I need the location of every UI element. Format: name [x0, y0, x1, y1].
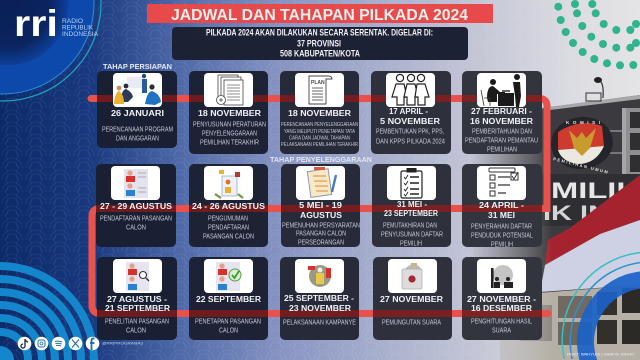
- card: 24 april: [462, 164, 542, 248]
- card: 24 april: PENYERAHAN DAFTAR: [471, 224, 532, 230]
- concrete grid: [500, 285, 640, 360]
- card: 18 november penyusunan: 18 NOVEMBER: [198, 108, 262, 118]
- banner lettering: MILIH: [551, 178, 640, 203]
- card: 31 mei: [372, 164, 451, 248]
- card: 26 januari: DAN ANGGARAN: [116, 136, 159, 142]
- social media icons: [18, 337, 143, 350]
- icon: documents: [216, 75, 243, 105]
- card: 17 april: 5 NOVEMBER: [380, 116, 441, 126]
- card: 5 mei: [281, 164, 360, 247]
- red flag band: [545, 175, 640, 265]
- card: 24 april: 31 MEI: [488, 210, 515, 220]
- heading: tahap penyelenggaraan: TAHAP PENYELENGGARAAN: [270, 155, 372, 164]
- card: 24-26 agustus: [189, 164, 268, 247]
- card: 27-29 agustus: 27 - 29 AGUSTUS: [100, 201, 172, 211]
- card: 24 april: PEMILIH: [491, 242, 513, 248]
- rri logo: INDONESIA: [62, 31, 99, 38]
- banner lettering: [544, 182, 624, 220]
- icon: form list: [489, 168, 518, 196]
- rri logo: REPUBLIK: [62, 24, 94, 32]
- card: 24-26 agustus: PENDAFTARAN: [208, 224, 249, 232]
- card: 27 agustus: 27 AGUSTUS -: [107, 294, 167, 304]
- rri logo: RADIO: [62, 18, 83, 25]
- card: 27 november - 16 desember: 27 NOVEMBER -: [467, 294, 536, 304]
- card: 18 november perencanaan: 18 NOVEMBER: [288, 108, 352, 118]
- card: 17 april: 17 APRIL -: [389, 106, 428, 116]
- subtitle panel: 37 PROVINSI: [297, 38, 341, 50]
- card: 24-26 agustus: PENGUMUMAN: [208, 216, 248, 222]
- card: 27 agustus: 21 SEPTEMBER: [105, 303, 171, 313]
- card: 24-26 agustus: PASANGAN CALON: [203, 234, 254, 240]
- card: 27 november - 16 desember: PENGHITUNGAN HASIL: [471, 318, 532, 326]
- heading: tahap persiapan: TAHAP PERSIAPAN: [103, 62, 172, 71]
- card: 31 mei: PEMUTAKHIRAN DAN: [383, 222, 437, 230]
- card: 26 januari: [97, 71, 177, 148]
- card: 26 januari: 26 JANUARI: [111, 108, 164, 118]
- card: 17 april: [371, 71, 451, 154]
- card: 27 agustus: [97, 257, 177, 340]
- card: 24 april: PENDUDUK POTENSIAL: [471, 232, 533, 240]
- card: 5 mei: PERSEORANGAN: [298, 240, 344, 246]
- card: 5 mei: 5 MEI - 19: [299, 200, 342, 210]
- card: 18 november penyusunan: PEMILIHAN TERAKHIR: [200, 140, 259, 146]
- subtitle panel: 508 KABUPATEN/KOTA: [280, 48, 360, 60]
- social media icons: @RRIPROGRAMA3: [102, 342, 143, 346]
- card: 18 november perencanaan: PERENCANAAN PENYELENGGARAAN: [281, 122, 358, 128]
- card: 27 november: [373, 257, 452, 340]
- card: 18 november perencanaan: CARA DAN JADWAL TAHAPAN: [289, 136, 350, 142]
- card: 17 april: PEMBENTUKAN PPK, PPS,: [376, 128, 444, 136]
- card: 27 agustus: CALON: [126, 328, 146, 334]
- lamp on roof: [586, 77, 603, 101]
- icon: clipboard checklist: [401, 168, 422, 198]
- icon: forms with magnifier: [126, 262, 149, 291]
- icon: counting with people: [491, 265, 513, 288]
- card: 31 mei: 31 MEI -: [397, 199, 427, 209]
- card: 22 september: 22 SEPTEMBER: [196, 294, 262, 304]
- card: 18 november perencanaan: PELAKSANAAN PEMILIHAN TERAKHIR: [281, 142, 358, 148]
- card: 27 februari: 16 NOVEMBER: [470, 116, 534, 126]
- card: 18 november perencanaan: [280, 71, 359, 154]
- card: 25 september: [280, 257, 359, 340]
- card: 22 september: [189, 257, 268, 340]
- card: 18 november perencanaan: YANG MELIPUTI PENETAPAN TATA: [284, 129, 355, 135]
- card: 18 november penyusunan: PENYUSUNAN PERATURAN: [193, 122, 266, 128]
- card: 27 februari: PEMILIHAN: [487, 146, 517, 154]
- rri logo: rri: [14, 3, 58, 44]
- photo: KPU building with flag: [470, 95, 640, 360]
- card: 17 april: DAN KPPS PILKADA 2024: [376, 138, 445, 146]
- card: 25 september: 25 SEPTEMBER -: [284, 293, 354, 303]
- card: 31 mei: PENYUSUNAN DAFTAR: [381, 232, 443, 238]
- card: 31 mei: PEMILIH: [400, 240, 422, 248]
- KPU emblem: PEMILIHAN UMUM: [553, 156, 609, 175]
- icon: campaign badge: [308, 265, 331, 287]
- card: 27 februari: 27 FEBRUARI -: [471, 106, 532, 116]
- card: 5 mei: AGUSTUS: [300, 210, 342, 220]
- photo credit: RISET: WAHYUNI | GRAFIS: RIDHO: [567, 352, 634, 356]
- icon: checklist and pencil: [307, 167, 336, 197]
- card: 27 november - 16 desember: SUARA: [492, 328, 511, 334]
- card: 18 november penyusunan: [189, 71, 268, 154]
- card: 27 februari: PENDAFTARAN PEMANTAU: [465, 138, 538, 144]
- subtitle panel: [172, 27, 468, 60]
- card: 27 november: 27 NOVEMBER: [380, 294, 444, 304]
- card: 27-29 agustus: [96, 164, 176, 247]
- icon: candidate forms: [124, 169, 148, 198]
- icon: ballot box: [402, 263, 422, 289]
- icon: forms with check: [216, 262, 241, 291]
- card: 26 januari: PERENCANAAN PROGRAM: [102, 126, 173, 134]
- card: 5 mei: PEMENUHAN PERSYARATAN: [282, 222, 360, 230]
- card: 22 september: CALON: [219, 328, 238, 334]
- card: 27 november: PEMUNGUTAN SUARA: [382, 320, 441, 326]
- card: 27 februari: [462, 71, 542, 154]
- icon: meeting: [114, 74, 161, 105]
- card: 27-29 agustus: PENDAFTARAN PASANGAN: [100, 216, 172, 222]
- bottom-right rings: [562, 253, 640, 360]
- icon: plan sheet: PLAN: [311, 80, 325, 86]
- card: 24-26 agustus: 24 - 26 AGUSTUS: [192, 201, 265, 211]
- dots pattern: [554, 0, 640, 69]
- card: 24 april: 24 APRIL -: [479, 200, 524, 210]
- KPU emblem: [548, 114, 616, 175]
- subtitle panel: PILKADA 2024 AKAN DILAKUKAN SECARA SERENTAK. DIGELAR DI:: [206, 28, 433, 38]
- title bar: JADWAL DAN TAHAPAN PILKADA 2024: [171, 7, 468, 24]
- top-left circle: [0, 0, 101, 101]
- building facade: [470, 95, 640, 300]
- card: 27 agustus: PENELITIAN PASANGAN: [105, 318, 169, 326]
- white flag band: [540, 220, 640, 292]
- card: 27 februari: PEMBERITAHUAN DAN: [472, 128, 532, 136]
- card: 27 november - 16 desember: [462, 257, 542, 340]
- banner lettering: IK IN: [543, 202, 609, 225]
- KPU emblem: KOMISI: [566, 120, 600, 125]
- card: 27 november - 16 desember: 16 DESEMBER: [471, 303, 533, 313]
- icon: desk with people: [481, 74, 521, 107]
- icon: clipboard announcement: [215, 170, 243, 198]
- icon: three people: [392, 74, 429, 105]
- card: 18 november penyusunan: PENYELENGGARAAN: [202, 130, 257, 138]
- card: 25 september: 23 NOVEMBER: [289, 303, 352, 313]
- card: 31 mei: 23 SEPTEMBER: [384, 208, 439, 218]
- card: 22 september: PENETAPAN PASANGAN: [195, 318, 261, 326]
- timeline arrow line: [91, 98, 548, 314]
- card: 25 september: PELAKSANAAN KAMPANYE: [283, 320, 356, 326]
- bottom-left arcs: [0, 266, 94, 360]
- card: 5 mei: PASANGAN CALON: [296, 230, 346, 238]
- rri logo: [14, 3, 99, 44]
- card: 27-29 agustus: CALON: [126, 224, 146, 232]
